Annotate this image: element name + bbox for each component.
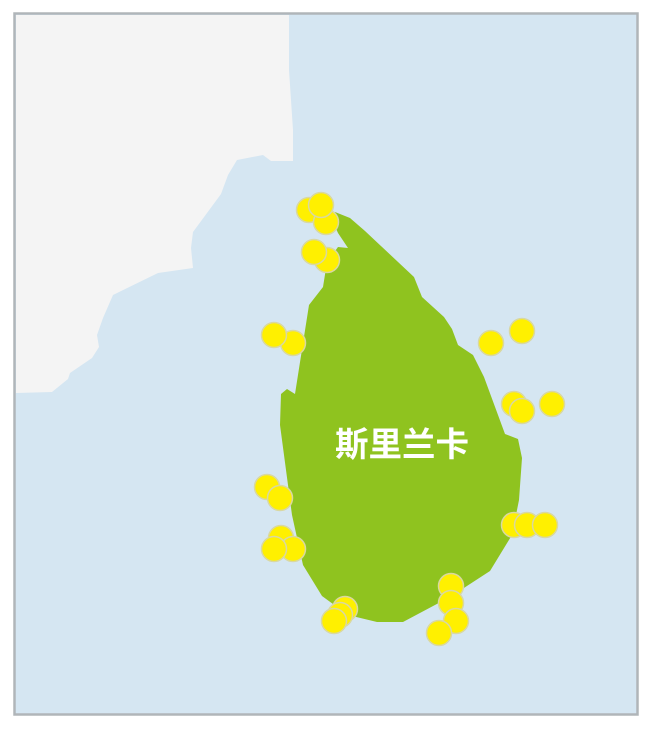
map: Sri Lanka island [280, 212, 522, 622]
landmass: India coast [16, 15, 293, 393]
markers: yellow location dots [254, 192, 564, 646]
label: Sri Lanka: 斯里兰卡 [335, 427, 469, 464]
